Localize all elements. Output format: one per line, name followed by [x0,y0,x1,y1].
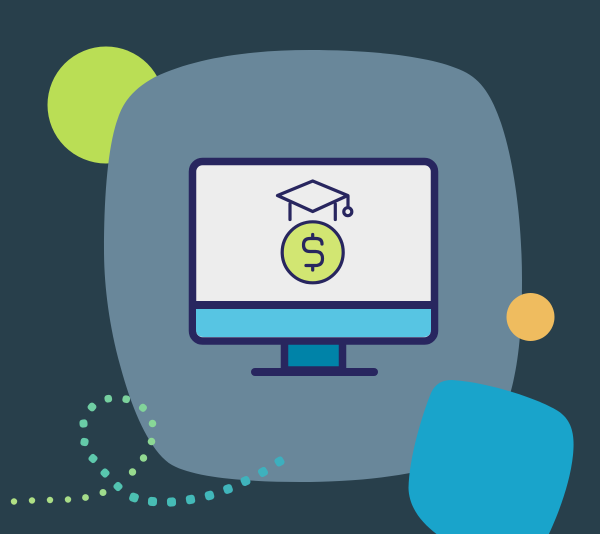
monitor lower bezel [196,309,431,337]
icon: graduation cap [278,181,352,220]
monitor screen [192,162,434,341]
icon: computer monitor [192,162,435,376]
dotted swirl line [11,394,286,507]
orange circle [506,293,554,341]
blue blob [408,380,574,534]
monitor stand neck [284,340,342,370]
dollar sign [304,238,322,266]
grey-blue blob [104,50,522,482]
monitor stand base [251,368,378,376]
monitor divider [192,301,435,309]
lime green circle [48,46,164,164]
icon: dollar coin [282,222,343,283]
